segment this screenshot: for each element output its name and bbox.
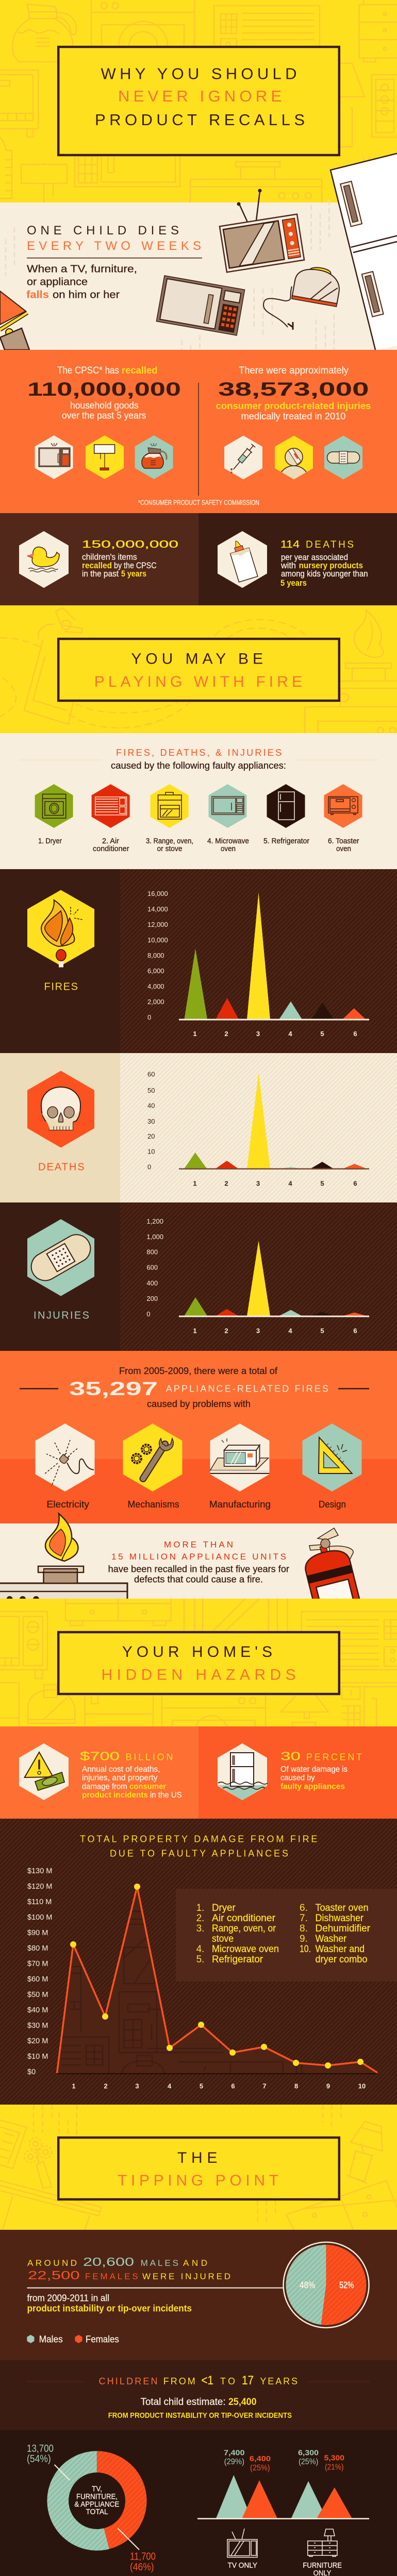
heading: children from <1 to 17 years: YEARS bbox=[260, 2376, 297, 2386]
stat: 150,000,000 children's items: 150,000,000 bbox=[82, 539, 178, 550]
bar chart: fires: 3 bbox=[256, 1030, 260, 1038]
bar chart: injuries: 4 bbox=[288, 1327, 292, 1334]
text: when a tv falls: When a TV, furniture, bbox=[27, 264, 137, 275]
icon: injured head bbox=[275, 436, 313, 479]
bar chart: fires: 6 bbox=[353, 1030, 357, 1038]
stat: 30 percent: PERCENT bbox=[306, 1752, 362, 1762]
chart: children tv and furniture: 6,300 bbox=[298, 2449, 319, 2458]
icon: microwave bbox=[35, 435, 73, 479]
pie chart: gender split: 52% bbox=[339, 2280, 354, 2290]
text: injury totals: WERE INJURED bbox=[142, 2272, 230, 2281]
appliance labels: 2. Air bbox=[102, 837, 119, 845]
icon: baby bottle bbox=[218, 531, 267, 588]
problem labels: Manufacturing bbox=[209, 1499, 271, 1510]
legend: appliance list: Dehumidifier bbox=[316, 1923, 371, 1934]
heading: children from <1 to 17 years: CHILDREN bbox=[99, 2376, 158, 2386]
line chart: property damage: 6 bbox=[231, 2082, 235, 2090]
line chart: property damage: 10 bbox=[358, 2082, 366, 2090]
bar chart: deaths: 20 bbox=[147, 1132, 155, 1140]
legend: appliance list: Dryer bbox=[212, 1903, 236, 1913]
heading: one child dies bbox=[27, 224, 201, 253]
background pattern: appliances bbox=[0, 0, 397, 202]
stat: 114 deaths: with bbox=[280, 561, 296, 570]
bar chart: fires: 6,000 bbox=[147, 967, 164, 975]
panel: fires: FIRES bbox=[44, 981, 78, 992]
icon: mechanisms bbox=[123, 1423, 182, 1492]
legend: appliance list: Washer and bbox=[316, 1944, 365, 1955]
bar chart: fires: 10,000 bbox=[147, 936, 168, 944]
text: child estimate: FROM PRODUCT INSTABILITY OR TIP-OVER INCIDENTS bbox=[108, 2411, 292, 2420]
background pattern: extinguisher, flame, stove bbox=[0, 608, 397, 734]
heading stat: From 2005-2009, there were a total of bbox=[119, 1366, 278, 1376]
heading: one child dies: EVERY TWO WEEKS bbox=[27, 239, 201, 253]
text: when a tv falls bbox=[26, 264, 137, 301]
bar chart: fires bbox=[147, 890, 369, 1038]
illustration: television bbox=[220, 189, 304, 272]
stat: $700 billion: injuries, and property bbox=[82, 1774, 158, 1783]
stat: 114 deaths: 114 bbox=[280, 539, 300, 550]
legend: males females: Males bbox=[39, 2334, 63, 2344]
section: tipping point bbox=[0, 2105, 397, 2230]
heading: one child dies: ONE CHILD DIES bbox=[27, 224, 179, 238]
illustration: falling lamp bbox=[0, 291, 29, 350]
appliance labels bbox=[38, 837, 359, 853]
bar chart: fires: 1 bbox=[193, 1030, 197, 1038]
line chart: property damage: $70 M bbox=[27, 1960, 48, 1968]
text: injury totals: AND bbox=[183, 2258, 207, 2268]
heading: caused by the following faulty appliances: bbox=[111, 760, 286, 771]
bar chart: deaths: 6 bbox=[353, 1179, 357, 1187]
panel: total property damage bbox=[0, 1819, 397, 2105]
heading: DUE TO FAULTY APPLIANCES bbox=[110, 1849, 288, 1859]
appliance labels: or stove bbox=[157, 844, 183, 853]
illustration: fire extinguisher bbox=[305, 1528, 360, 1599]
appliance labels: 3. Range, oven, bbox=[146, 837, 193, 845]
stat: 30 percent: 30 bbox=[280, 1749, 301, 1762]
stat: 150,000,000 children's items: children's items bbox=[82, 552, 137, 562]
section: playing with fire bbox=[0, 605, 397, 734]
panel: children charts bbox=[0, 2430, 397, 2576]
heading: TOTAL PROPERTY DAMAGE FROM FIRE bbox=[80, 1834, 317, 1844]
appliance labels: oven bbox=[221, 844, 236, 853]
donut chart: children: FURNITURE, bbox=[76, 2492, 118, 2501]
line chart: property damage: $40 M bbox=[27, 2006, 48, 2014]
stat: $700 billion: damage from bbox=[82, 1783, 127, 1791]
stat: 30 percent: faulty appliances bbox=[280, 1783, 345, 1791]
legend: appliance list: 6. bbox=[300, 1903, 308, 1913]
problem labels: Electricity bbox=[46, 1499, 89, 1510]
chart: children tv and furniture: 5,300 bbox=[324, 2454, 344, 2463]
bar chart: fires: 12,000 bbox=[147, 921, 168, 928]
heading bbox=[80, 1834, 317, 1859]
panel: children heading bbox=[0, 2360, 397, 2430]
panel: nursery stats bbox=[0, 513, 397, 605]
text: when a tv falls: or appliance bbox=[27, 277, 88, 288]
problem labels: Mechanisms bbox=[128, 1499, 179, 1510]
stat: $700 billion: $700 bbox=[80, 1749, 120, 1762]
bar chart: injuries: 0 bbox=[146, 1310, 151, 1318]
bar chart: deaths: 5 bbox=[320, 1179, 324, 1187]
heading: children from <1 to 17 years: TO bbox=[220, 2376, 235, 2386]
line chart: property damage: $10 M bbox=[27, 2053, 48, 2061]
title box: PRODUCT RECALLS bbox=[95, 111, 305, 129]
bar chart: injuries: 5 bbox=[320, 1327, 324, 1334]
text: injury totals: AROUND bbox=[27, 2258, 77, 2268]
stat: 30 percent bbox=[280, 1749, 362, 1791]
line chart: property damage: $50 M bbox=[27, 1991, 48, 1999]
background pattern: tipping furniture bbox=[0, 2105, 397, 2230]
bar chart: deaths: 1 bbox=[193, 1179, 197, 1187]
bar chart: injuries: 3 bbox=[256, 1327, 260, 1334]
icon: flooded fridge bbox=[218, 1743, 268, 1800]
appliance labels: 4. Microwave bbox=[207, 837, 249, 845]
text: child estimate: Total child estimate: bbox=[141, 2397, 226, 2408]
donut chart: children: TOTAL bbox=[86, 2507, 108, 2516]
line chart: property damage: 4 bbox=[168, 2082, 172, 2090]
line chart: property damage: 9 bbox=[326, 2082, 330, 2090]
text: recalled appliance units: defects that could cause a fire. bbox=[134, 1574, 263, 1584]
chart: children tv and furniture: 7,400 bbox=[224, 2449, 244, 2458]
text: recalled appliance units: 15 MILLION APPLIANCE UNITS bbox=[111, 1552, 286, 1562]
appliance labels: 5. Refrigerator bbox=[263, 837, 309, 845]
legend: males females: Females bbox=[86, 2334, 119, 2344]
donut chart: children: 13,700 bbox=[27, 2443, 54, 2454]
legend: appliance list: Washer bbox=[316, 1934, 347, 1944]
line chart: property damage: $120 M bbox=[27, 1883, 52, 1891]
donut chart: children: & APPLIANCE bbox=[74, 2500, 119, 2509]
chart: children tv and furniture bbox=[197, 2449, 369, 2519]
bar chart: injuries: 800 bbox=[146, 1248, 158, 1256]
text: injury totals: MALES bbox=[141, 2258, 178, 2268]
donut chart: children: 11,700 bbox=[130, 2551, 156, 2563]
panel: one child dies bbox=[0, 143, 397, 351]
heading: children from <1 to 17 years bbox=[99, 2374, 297, 2387]
problem labels: Design bbox=[319, 1499, 346, 1510]
bar chart: deaths: 30 bbox=[147, 1117, 155, 1125]
icon: design bbox=[303, 1423, 361, 1492]
text: child estimate bbox=[108, 2397, 292, 2420]
heading stat bbox=[69, 1366, 328, 1409]
icon: skull bbox=[27, 1071, 94, 1148]
line chart: property damage: $90 M bbox=[27, 1929, 48, 1937]
stat: 110,000,000 recalled: The CPSC* has bbox=[57, 365, 119, 376]
bar chart: fires: 2,000 bbox=[147, 998, 164, 1006]
legend: appliance list: stove bbox=[212, 1934, 234, 1944]
stat: 150,000,000 children's items: recalled bbox=[82, 561, 112, 570]
icon: toaster oven bbox=[324, 784, 362, 828]
title box bbox=[58, 47, 339, 155]
bar chart: fires: 2 bbox=[224, 1030, 228, 1038]
panel: injured males and females bbox=[0, 2230, 397, 2360]
line chart: property damage: $20 M bbox=[27, 2037, 48, 2045]
stat: 38,573,000 injuries: consumer product-related injuries bbox=[216, 401, 371, 411]
line chart: property damage: 2 bbox=[104, 2082, 108, 2090]
legend: appliance list: 2. bbox=[196, 1913, 204, 1924]
stat: 110,000,000 recalled: recalled bbox=[122, 365, 158, 376]
icon: bandage bbox=[26, 1219, 95, 1296]
icon: warning and money bbox=[19, 1743, 69, 1800]
heading: children from <1 to 17 years: 17 bbox=[242, 2374, 254, 2387]
title box bbox=[58, 1632, 339, 1694]
heading stat: caused by problems with bbox=[147, 1399, 251, 1409]
legend: appliance list: dryer combo bbox=[316, 1954, 367, 1965]
bar chart: injuries: 2 bbox=[224, 1327, 228, 1334]
stat: 150,000,000 children's items: by the CPSC bbox=[114, 561, 157, 570]
bar chart: fires: 4 bbox=[288, 1030, 292, 1038]
stat: 114 deaths: per year associated bbox=[281, 553, 348, 562]
text: child estimate: 25,400 bbox=[228, 2397, 257, 2408]
icon: range bbox=[151, 784, 189, 828]
legend: appliance list: 1. bbox=[196, 1903, 204, 1913]
stat: 38,573,000 injuries bbox=[216, 365, 371, 421]
line chart: property damage: $100 M bbox=[27, 1913, 52, 1922]
title box: NEVER IGNORE bbox=[118, 87, 282, 105]
bar chart: deaths: 0 bbox=[147, 1163, 151, 1171]
line chart: property damage: 8 bbox=[294, 2082, 298, 2090]
section: hidden hazards bbox=[0, 1599, 397, 1726]
pie chart: gender split bbox=[284, 2242, 369, 2328]
illustration: stove with pot bbox=[0, 1565, 128, 1599]
panel: hazards stats bbox=[0, 1726, 397, 1819]
chart: children tv and furniture: (25%) bbox=[250, 2464, 270, 2472]
panel: injuries: INJURIES bbox=[34, 1310, 89, 1321]
heading: FIRES, DEATHS, & INJURIES bbox=[116, 748, 282, 758]
pie chart: gender split: 48% bbox=[300, 2280, 316, 2290]
stat: 114 deaths: nursery products bbox=[299, 561, 363, 570]
legend: appliance list: Air conditioner bbox=[212, 1913, 276, 1924]
bar chart: deaths: 40 bbox=[147, 1102, 155, 1110]
text: when a tv falls: on him or her bbox=[53, 290, 120, 301]
bar chart: injuries: 1,000 bbox=[146, 1233, 163, 1241]
text: recalled appliance units bbox=[108, 1540, 289, 1584]
chart: children tv and furniture: (21%) bbox=[325, 2463, 343, 2472]
bar chart: deaths: 4 bbox=[288, 1179, 292, 1187]
footnote: *CONSUMER PRODUCT SAFETY COMMISSION bbox=[138, 499, 259, 506]
falling motion lines bbox=[6, 200, 334, 350]
title box: WHY YOU SHOULD bbox=[101, 65, 297, 83]
legend: appliance list: 9. bbox=[300, 1934, 308, 1944]
panel: 35,297 appliance fires bbox=[0, 1351, 397, 1523]
stat: 38,573,000 injuries: 38,573,000 bbox=[218, 379, 369, 400]
icon: refrigerator bbox=[267, 784, 305, 828]
donut chart: children: TV, bbox=[92, 2484, 102, 2493]
stat: 30 percent: caused by bbox=[280, 1774, 315, 1783]
icon: manufacturing bbox=[210, 1423, 270, 1492]
line chart: property damage: $130 M bbox=[27, 1867, 52, 1875]
title box bbox=[58, 2138, 339, 2199]
icon: air conditioner bbox=[92, 784, 130, 828]
problem labels bbox=[46, 1499, 346, 1510]
title box: YOUR HOME'S bbox=[122, 1643, 272, 1660]
line chart: property damage: 1 bbox=[72, 2082, 76, 2090]
icon: dryer bbox=[35, 784, 73, 828]
bar chart: fires: 8,000 bbox=[147, 952, 164, 959]
title box: PLAYING WITH FIRE bbox=[94, 673, 302, 690]
stat: $700 billion bbox=[80, 1749, 182, 1800]
bar chart: fires: 14,000 bbox=[147, 905, 168, 913]
legend: appliance list: Dishwasher bbox=[316, 1913, 364, 1924]
bar chart: injuries: 1,200 bbox=[146, 1217, 163, 1225]
line chart: property damage bbox=[27, 1867, 377, 2090]
icon: bandage bbox=[324, 436, 362, 479]
bar chart: injuries: 400 bbox=[146, 1279, 158, 1287]
panel: faulty appliances key bbox=[0, 733, 397, 869]
text: injury totals: 22,500 bbox=[28, 2268, 80, 2282]
heading stat: APPLIANCE-RELATED FIRES bbox=[166, 1383, 328, 1394]
donut chart: children: (46%) bbox=[130, 2562, 154, 2573]
appliance labels: 1. Dryer bbox=[38, 837, 62, 845]
stat: 114 deaths: DEATHS bbox=[306, 539, 354, 550]
stat: 38,573,000 injuries: There were approximately bbox=[239, 365, 349, 376]
labels: tv and furniture only: FURNITURE bbox=[303, 2561, 342, 2570]
line chart: property damage: $30 M bbox=[27, 2022, 48, 2030]
stat: 150,000,000 children's items bbox=[82, 539, 178, 579]
icon: burning match bbox=[27, 890, 94, 968]
icon: coffee pot bbox=[135, 435, 173, 479]
text: period: product instability or tip-over incidents bbox=[27, 2303, 192, 2313]
line chart: property damage: 7 bbox=[262, 2082, 267, 2090]
stat: 110,000,000 recalled: over the past 5 years bbox=[62, 410, 146, 420]
legend: appliance list: 4. bbox=[196, 1944, 204, 1955]
stat: $700 billion: BILLION bbox=[126, 1752, 173, 1762]
panel: deaths bbox=[0, 1053, 397, 1202]
text: recalled appliance units: MORE THAN bbox=[164, 1540, 233, 1550]
stat: 114 deaths: 5 years bbox=[280, 579, 307, 588]
heading: children from <1 to 17 years: FROM bbox=[163, 2376, 195, 2386]
stat: 114 deaths: among kids younger than bbox=[281, 569, 368, 579]
line chart: property damage: 3 bbox=[135, 2082, 139, 2090]
text: injury totals bbox=[27, 2255, 230, 2282]
icon: electricity bbox=[36, 1423, 94, 1492]
bar chart: fires: 0 bbox=[147, 1013, 151, 1021]
panel: 15 million units bbox=[0, 1512, 360, 1599]
stat: $700 billion: product incidents bbox=[82, 1791, 148, 1800]
heading: children from <1 to 17 years: <1 bbox=[201, 2374, 213, 2387]
bar chart: injuries: 200 bbox=[146, 1295, 158, 1302]
line chart: property damage: $60 M bbox=[27, 1975, 48, 1984]
bar chart: deaths: 3 bbox=[256, 1179, 260, 1187]
line chart: property damage: 5 bbox=[200, 2082, 203, 2090]
bar chart: deaths: 50 bbox=[147, 1087, 155, 1094]
bar chart: injuries bbox=[146, 1217, 369, 1334]
panel: deaths: DEATHS bbox=[38, 1161, 85, 1173]
legend: appliance list: 10. bbox=[300, 1944, 311, 1955]
icon: dresser and lamp outline bbox=[308, 2529, 337, 2556]
stat: 110,000,000 recalled bbox=[27, 365, 181, 420]
text: injury totals: 20,600 bbox=[83, 2255, 134, 2268]
icon: lamp bbox=[86, 435, 124, 479]
stat: 110,000,000 recalled: household goods bbox=[70, 400, 139, 411]
legend: males females bbox=[27, 2334, 119, 2344]
bar chart: deaths bbox=[147, 1071, 369, 1187]
panel: recall statistics bbox=[0, 350, 397, 513]
stat: $700 billion: in the US bbox=[150, 1791, 182, 1800]
icon: tv outline bbox=[227, 2529, 257, 2557]
title box: YOU MAY BE bbox=[131, 651, 263, 668]
text: injury totals: FEMALES bbox=[85, 2272, 138, 2281]
header section bbox=[0, 0, 397, 202]
title box: THE bbox=[177, 2149, 217, 2166]
bar chart: fires: 4,000 bbox=[147, 982, 164, 990]
illustration: refrigerator bbox=[330, 143, 397, 351]
appliance labels: oven bbox=[336, 844, 351, 853]
icon: syringe bbox=[224, 436, 262, 479]
stat: 38,573,000 injuries: medically treated in 2010 bbox=[241, 411, 345, 421]
stat: 110,000,000 recalled: 110,000,000 bbox=[27, 379, 181, 400]
legend: appliance list: Microwave oven bbox=[212, 1944, 279, 1955]
text: when a tv falls: falls bbox=[26, 290, 49, 301]
text: period bbox=[27, 2293, 192, 2313]
panel: fires bbox=[0, 869, 397, 1053]
bar chart: deaths: 2 bbox=[224, 1179, 228, 1187]
heading bbox=[111, 748, 286, 771]
stat: 114 deaths bbox=[280, 539, 368, 588]
panel: injuries bbox=[0, 1202, 397, 1351]
line chart: property damage: $80 M bbox=[27, 1944, 48, 1953]
bar chart: injuries: 6 bbox=[353, 1327, 357, 1334]
stat: 30 percent: Of water damage is bbox=[280, 1765, 348, 1774]
title box bbox=[58, 639, 339, 701]
legend: appliance list: 5. bbox=[196, 1954, 204, 1965]
bar chart: deaths: 10 bbox=[147, 1148, 155, 1156]
stat: $700 billion: consumer bbox=[129, 1783, 166, 1791]
stat: 150,000,000 children's items: 5 years bbox=[121, 569, 146, 579]
legend: appliance list: 7. bbox=[300, 1913, 308, 1924]
bar chart: injuries: 1 bbox=[193, 1327, 197, 1334]
bar chart: fires: 5 bbox=[320, 1030, 324, 1038]
labels: tv and furniture only bbox=[228, 2561, 342, 2576]
illustration: microwave bbox=[156, 276, 245, 335]
donut chart: children: (54%) bbox=[27, 2453, 51, 2465]
heading stat: 35,297 bbox=[69, 1378, 158, 1399]
bar chart: injuries: 600 bbox=[146, 1264, 158, 1272]
background pattern: home appliances bbox=[0, 1599, 397, 1726]
legend: appliance list: 3. bbox=[196, 1923, 204, 1934]
bar chart: fires: 16,000 bbox=[147, 890, 168, 897]
chart: children tv and furniture: 6,400 bbox=[250, 2454, 271, 2463]
text: period: from 2009-2011 in all bbox=[27, 2293, 109, 2303]
line chart: property damage: $110 M bbox=[27, 1898, 52, 1906]
bar chart: deaths: 60 bbox=[147, 1071, 155, 1078]
legend: appliance list: 8. bbox=[300, 1923, 308, 1934]
donut chart: children bbox=[27, 2443, 156, 2573]
stat: 150,000,000 children's items: in the past bbox=[82, 569, 119, 579]
title box: TIPPING POINT bbox=[118, 2172, 278, 2189]
legend: appliance list: Range, oven, or bbox=[212, 1923, 276, 1934]
text: recalled appliance units: have been recalled in the past five years for bbox=[108, 1564, 289, 1574]
icon: rubber duck bbox=[19, 531, 69, 588]
labels: tv and furniture only: TV ONLY bbox=[228, 2561, 257, 2570]
line chart: property damage: $0 bbox=[27, 2068, 36, 2076]
appliance labels: 6. Toaster bbox=[328, 837, 359, 845]
illustration: flame bbox=[45, 1514, 78, 1561]
illustration: toaster with cord bbox=[263, 264, 342, 330]
icon: microwave bbox=[208, 784, 246, 828]
title box: HIDDEN HAZARDS bbox=[101, 1667, 296, 1684]
appliance labels: conditioner bbox=[93, 844, 129, 853]
legend: appliance list bbox=[176, 1889, 397, 1981]
stat: $700 billion: Annual cost of deaths, bbox=[82, 1765, 160, 1774]
legend: appliance list: Toaster oven bbox=[316, 1903, 369, 1913]
chart: children tv and furniture: (25%) bbox=[299, 2458, 318, 2466]
legend: appliance list: Refrigerator bbox=[212, 1954, 263, 1965]
chart: children tv and furniture: (29%) bbox=[224, 2458, 244, 2466]
